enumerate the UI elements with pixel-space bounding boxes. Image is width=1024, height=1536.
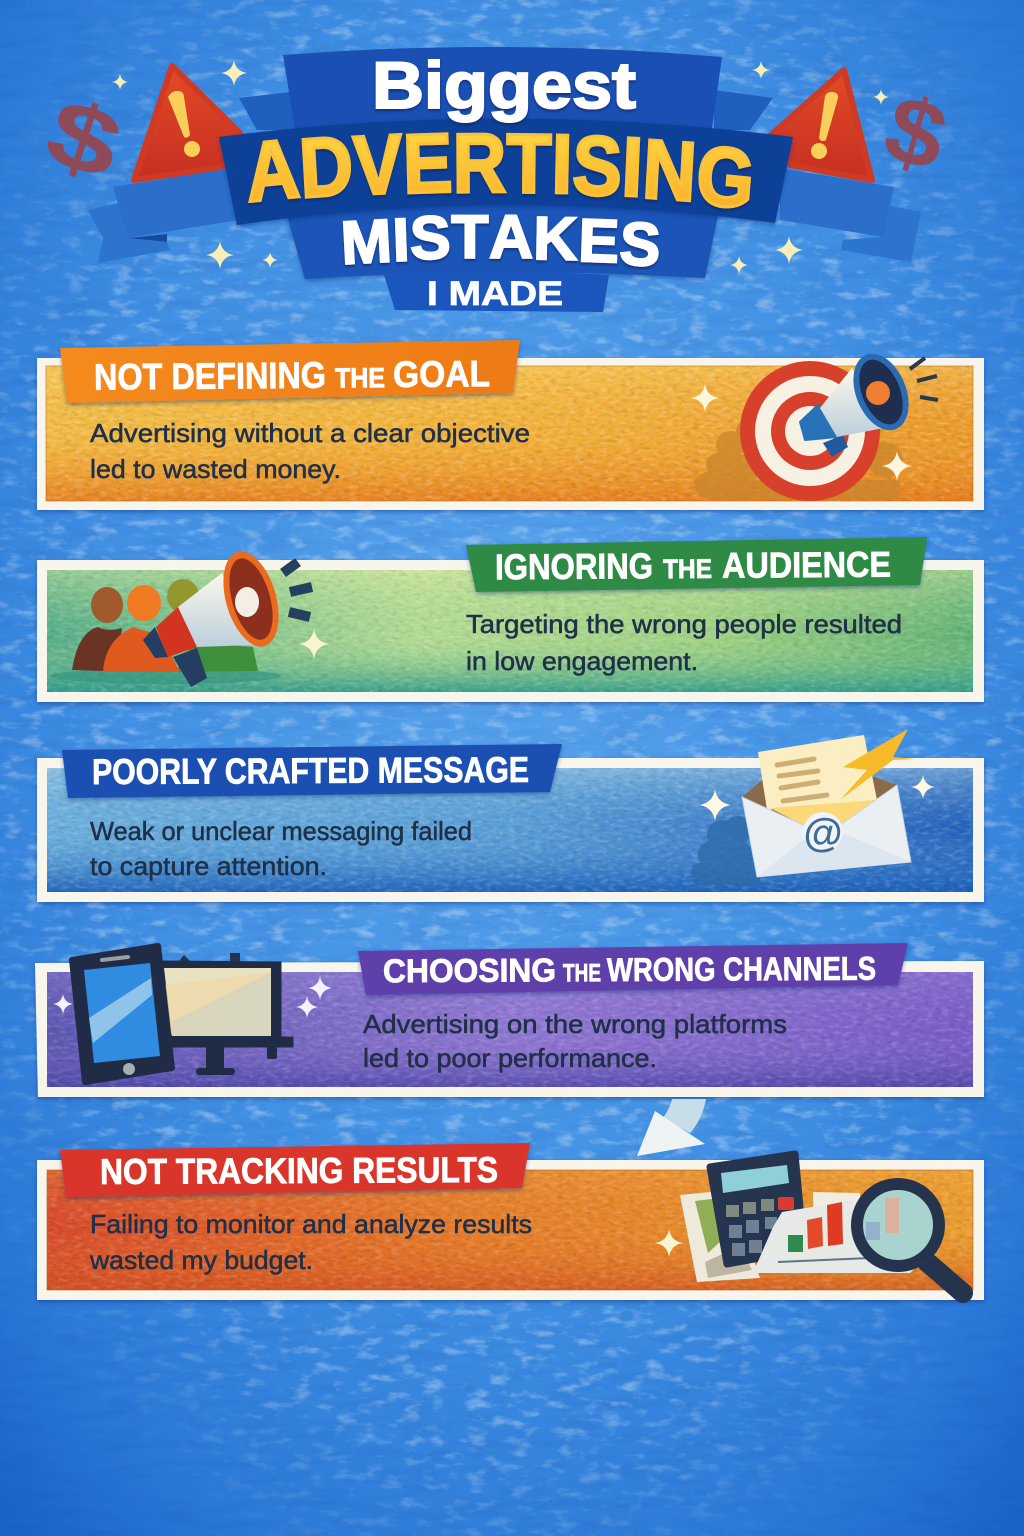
icon: envelope with lightning: @	[803, 811, 843, 855]
body text	[363, 1009, 787, 1073]
body text: Advertising without a clear objective	[90, 418, 530, 448]
heading tag: THE	[663, 554, 712, 584]
body text	[90, 816, 472, 881]
body text	[90, 418, 530, 484]
heading tag: NOT DEFINING	[94, 355, 326, 398]
body text: wasted my budget.	[89, 1245, 313, 1275]
heading tag: CHOOSING	[383, 951, 556, 989]
heading tag: WRONG CHANNELS	[607, 950, 876, 988]
heading tag: POORLY CRAFTED MESSAGE	[92, 749, 529, 792]
heading: Advertising: ADVERTISING	[242, 115, 758, 227]
panel: not defining the goal	[37, 340, 984, 510]
icon: phone and monitor	[53, 946, 332, 1082]
body text: Weak or unclear messaging failed	[90, 816, 472, 846]
panel: choosing the wrong channels	[35, 943, 984, 1097]
icon: right dollar sign: $	[874, 74, 958, 191]
panel fill	[47, 1170, 973, 1290]
icon: envelope with lightning	[691, 729, 935, 885]
body text: in low engagement.	[466, 646, 698, 676]
panel fill	[47, 768, 973, 892]
body text	[89, 1209, 532, 1275]
heading tag	[466, 537, 927, 592]
arrow	[637, 1099, 706, 1156]
body text: led to poor performance.	[363, 1043, 657, 1073]
icon: right warning triangle	[770, 70, 872, 180]
ribbon: Biggest	[283, 47, 722, 135]
panel: poorly crafted message	[37, 729, 984, 902]
heading tag: THE	[563, 959, 601, 987]
icon: calculator, chart and magnifier	[655, 1154, 963, 1293]
panel: not tracking results	[37, 1143, 984, 1300]
body text: led to wasted money.	[90, 454, 341, 484]
icon: left warning triangle	[134, 66, 240, 180]
heading: Mistakes: MISTAKES	[339, 203, 662, 279]
body text: to capture attention.	[90, 851, 327, 881]
icon: left dollar sign: $	[34, 78, 134, 200]
body text: Targeting the wrong people resulted	[466, 609, 902, 639]
left ribbon tail	[88, 92, 299, 263]
ribbon: I Made	[384, 272, 609, 312]
icon: target and megaphone	[691, 346, 938, 501]
body text: Failing to monitor and analyze results	[90, 1209, 532, 1239]
ribbon: Mistakes	[284, 205, 720, 279]
decorative sparkles	[112, 60, 889, 274]
ribbon: Advertising	[219, 118, 793, 225]
panel: ignoring the audience	[37, 537, 984, 702]
heading: I Made: I MADE	[427, 275, 563, 313]
heading tag: AUDIENCE	[722, 544, 891, 586]
heading tag: IGNORING	[495, 545, 653, 587]
heading tag	[358, 943, 908, 995]
heading tag	[60, 340, 520, 403]
heading tag: THE	[335, 362, 385, 394]
panel fill	[47, 570, 973, 692]
panel fill	[47, 972, 973, 1087]
heading tag: GOAL	[393, 353, 490, 395]
heading tag: NOT TRACKING RESULTS	[100, 1149, 498, 1192]
body text	[466, 609, 902, 676]
right ribbon tail	[714, 90, 921, 262]
heading: Biggest: Biggest	[372, 48, 636, 122]
title banner	[34, 47, 958, 313]
panel fill	[46, 366, 973, 501]
icon: audience and megaphone	[51, 545, 329, 687]
body text: Advertising on the wrong platforms	[363, 1009, 787, 1039]
